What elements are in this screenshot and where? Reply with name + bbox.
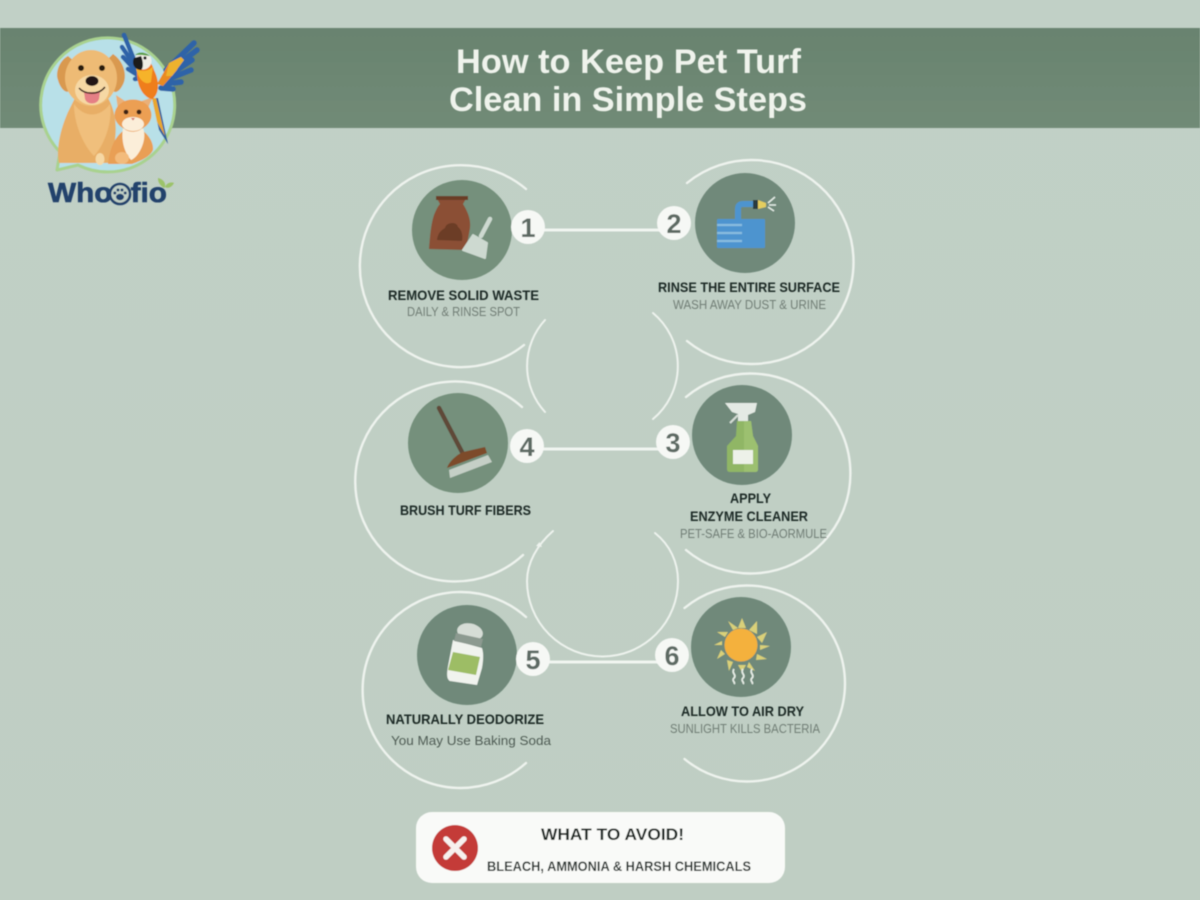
icon: parrot — [122, 35, 197, 144]
step 2 number: 2 — [666, 209, 682, 239]
step 1 number: 1 — [520, 213, 536, 243]
step 6 number: 6 — [664, 641, 680, 671]
icon: sun — [691, 597, 791, 697]
step 2 number — [657, 206, 691, 240]
step 5 note: You May Use Baking Soda — [391, 733, 552, 748]
step 1 ring — [360, 165, 526, 367]
header band — [0, 28, 1200, 128]
step 3 ring — [686, 374, 850, 574]
step 6 note: SUNLIGHT KILLS BACTERIA — [670, 721, 820, 736]
step 6 label: ALLOW TO AIR DRY — [681, 703, 805, 719]
step 4 number — [510, 429, 544, 463]
step 2 — [657, 160, 854, 364]
step 3 — [656, 374, 850, 574]
step 3 label — [690, 490, 808, 524]
step 1 note: DAILY & RINSE SPOT — [407, 304, 520, 319]
connector arcs — [527, 313, 678, 656]
connector line 5 to 6 — [545, 660, 660, 664]
step 3 number — [656, 425, 690, 459]
icon: baking soda shaker — [417, 605, 517, 705]
step 1 number — [511, 210, 545, 244]
step 1 — [360, 165, 662, 367]
step 6 number — [655, 638, 689, 672]
icon: waste bag and scoop — [412, 180, 512, 280]
connector line 1 to 2 — [540, 228, 662, 232]
step 1 label: REMOVE SOLID WASTE — [388, 287, 539, 303]
step 6 — [655, 586, 845, 782]
step 3 note: PET-SAFE & BIO-AORMULE — [680, 526, 827, 541]
icon: red cross — [432, 825, 478, 871]
logo: Whoofio — [41, 35, 197, 208]
step 5 number: 5 — [525, 645, 541, 675]
step 5 label: NATURALLY DEODORIZE — [386, 711, 544, 727]
icon: cat — [108, 95, 153, 164]
icon: dog — [57, 50, 125, 165]
step 2 note: WASH AWAY DUST & URINE — [673, 297, 826, 312]
step 3 number: 3 — [665, 428, 681, 458]
step 2 label: RINSE THE ENTIRE SURFACE — [658, 279, 840, 295]
step 5 number — [516, 642, 550, 676]
connector line 4 to 3 — [540, 448, 662, 450]
callout text: BLEACH, AMMONIA & HARSH CHEMICALS — [487, 858, 751, 874]
icon: paw in wordmark — [110, 184, 130, 204]
icon: speech bubble — [41, 38, 175, 172]
logo wordmark: Whoofio — [48, 177, 167, 208]
icon: brush — [408, 393, 508, 493]
step 3 label: ENZYME CLEANER — [690, 508, 808, 524]
step 3 label: APPLY — [730, 490, 772, 506]
title — [449, 43, 807, 119]
step 4 label: BRUSH TURF FIBERS — [400, 502, 531, 518]
title: How to Keep Pet Turf — [456, 43, 802, 81]
icon: leaves — [158, 178, 174, 188]
step 2 ring — [687, 160, 854, 364]
step 4 number: 4 — [519, 432, 535, 462]
callout: what to avoid — [416, 812, 785, 883]
step 6 ring — [684, 586, 845, 782]
step 5 ring — [363, 592, 526, 788]
title: Clean in Simple Steps — [449, 81, 807, 119]
callout heading: WHAT TO AVOID! — [541, 825, 684, 844]
step 5 — [363, 592, 660, 788]
step 4 — [355, 381, 662, 581]
step 4 ring — [355, 381, 523, 581]
icon: hose and nozzle — [695, 173, 795, 273]
icon: spray bottle — [692, 385, 792, 485]
